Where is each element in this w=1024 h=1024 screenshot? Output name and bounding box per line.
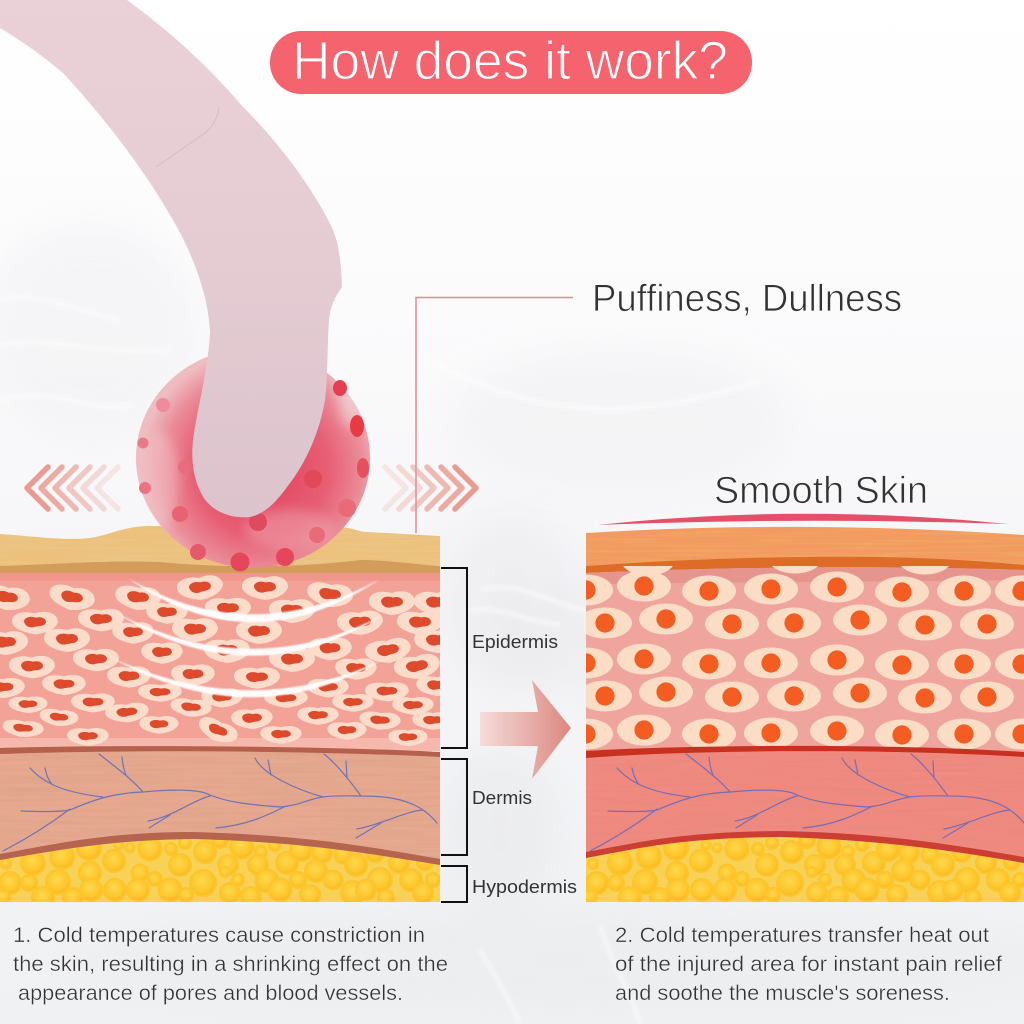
stratum corneum left bbox=[0, 526, 440, 573]
caption right: and soothe the muscle's soreness. bbox=[615, 982, 950, 1005]
blood vessels right bbox=[590, 754, 1024, 851]
label: Hypodermis: Hypodermis bbox=[472, 877, 577, 897]
stratum corneum right bbox=[586, 526, 1024, 573]
fat layer right (hypodermis) bbox=[583, 831, 1024, 909]
label: Epidermis: Epidermis bbox=[472, 632, 558, 652]
epidermis cells with kidney-shaped nuclei bbox=[0, 574, 460, 748]
epidermis left bbox=[0, 570, 460, 755]
epidermis right bbox=[586, 566, 1024, 752]
caption right: of the injured area for instant pain relief bbox=[615, 953, 1002, 976]
callout line bbox=[416, 298, 573, 533]
dermis left bbox=[0, 745, 440, 865]
caption right bbox=[615, 924, 1002, 1005]
caption right: 2. Cold temperatures transfer heat out bbox=[615, 924, 989, 947]
caption left: 1. Cold temperatures cause constriction in bbox=[13, 924, 425, 947]
caption left bbox=[13, 924, 448, 1005]
roller handle bbox=[0, 0, 342, 517]
heading: Puffiness, Dullness: Puffiness, Dullness bbox=[592, 278, 902, 320]
red arc above smooth skin bbox=[598, 514, 1008, 525]
panel: left skin cross-section bbox=[0, 520, 460, 909]
right arrows: chevrons bbox=[385, 467, 476, 509]
cold wave arcs bbox=[110, 578, 383, 697]
ball dots bbox=[138, 380, 369, 572]
round cells with orange nuclei bbox=[586, 566, 1024, 750]
title pill: How does it work? bbox=[292, 31, 728, 91]
dermis right bbox=[586, 745, 1024, 865]
bracket: dermis bbox=[441, 759, 467, 855]
arrow between panels bbox=[480, 680, 571, 779]
heading: Smooth Skin: Smooth Skin bbox=[714, 470, 928, 512]
panel: right skin cross-section bbox=[559, 520, 1024, 909]
roller ball bbox=[136, 348, 370, 572]
bracket: epidermis bbox=[441, 568, 467, 748]
left arrows: chevrons bbox=[27, 467, 118, 509]
fat layer left (hypodermis) bbox=[0, 832, 440, 909]
caption left: appearance of pores and blood vessels. bbox=[18, 982, 403, 1005]
label: Dermis: Dermis bbox=[472, 788, 532, 808]
bracket: hypodermis bbox=[441, 866, 467, 902]
blood vessels left bbox=[3, 754, 437, 851]
caption left: the skin, resulting in a shrinking effect on the bbox=[13, 953, 448, 976]
